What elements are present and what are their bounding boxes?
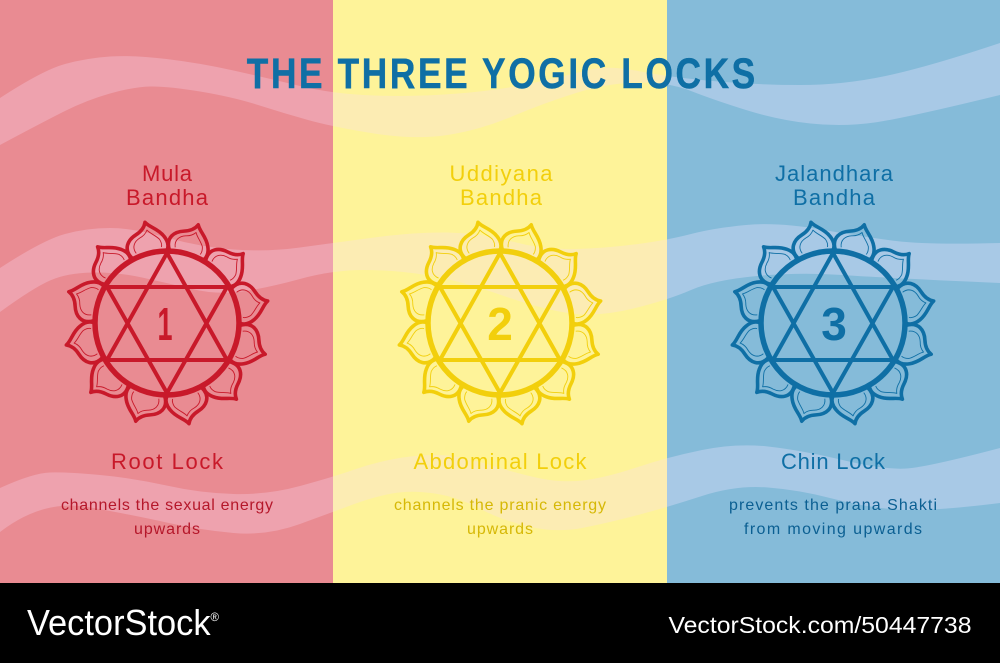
title: THE THREE YOGIC LOCKS (247, 50, 755, 98)
wave bands on red panel (0, 56, 333, 534)
description line two: upwards (134, 521, 200, 538)
panel content: Mula Bandha (61, 161, 273, 538)
footer bar (0, 583, 1000, 663)
heading line two: Bandha (460, 185, 543, 210)
subheading: Abdominal Lock: Abdominal Lock (414, 449, 588, 474)
wave bands on yellow panel (333, 68, 667, 530)
number 1: 1 (158, 298, 172, 350)
panel: Mula Bandha background (0, 0, 333, 583)
heading line two: Bandha (126, 185, 209, 210)
wave bands on blue panel (667, 43, 1000, 510)
icon: chakra 3 (728, 218, 938, 428)
heading: Uddiyana: Uddiyana (450, 161, 553, 186)
panel content: Uddiyana Bandha (394, 161, 606, 538)
heading: Mula: Mula (142, 161, 193, 186)
footer logo: VectorStock (27, 602, 219, 643)
heading line two: Bandha (793, 185, 876, 210)
description: pranic energy: channels the pranic energy (394, 497, 606, 514)
icon: chakra 1 (62, 218, 272, 428)
panel content: Jalandhara Bandha (728, 161, 938, 538)
number 2: 2 (487, 298, 513, 350)
icon: chakra 2 (395, 218, 605, 428)
heading: Jalandhara: Jalandhara (775, 161, 894, 186)
description line two: upwards (467, 521, 533, 538)
footer url: VectorStock.com/50447738 (668, 612, 972, 638)
description: prana Shakti: prevents the prana Shakti (729, 497, 937, 514)
number 3: 3 (821, 298, 847, 350)
panel: Jalandhara Bandha background (667, 0, 1000, 583)
description line two: from moving upwards (744, 521, 922, 538)
subheading: Root Lock: Root Lock (111, 449, 224, 474)
footer logo: ® (211, 610, 219, 624)
description: sexual energy: channels the sexual energy (61, 497, 273, 514)
subheading: Chin Lock: Chin Lock (781, 449, 886, 474)
panel: Uddiyana Bandha background (333, 0, 667, 583)
